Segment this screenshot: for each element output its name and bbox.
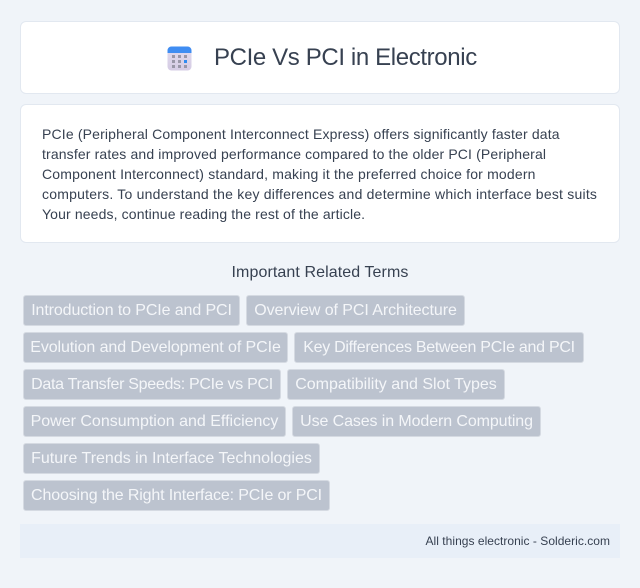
intro text: transfer rates and improved performance compared to the older PCI (Peripheral — [42, 146, 546, 162]
tag: Choosing the Right Interface: PCIe or PCI — [31, 487, 322, 504]
tag — [287, 369, 505, 400]
tag — [246, 295, 465, 326]
title: PCIe Vs PCI in Electronic — [214, 44, 477, 71]
icon: calendar — [168, 46, 192, 70]
intro text: computers. To understand the key differences and determine which interface best suits — [42, 186, 597, 202]
tag — [23, 369, 281, 400]
intro text: Your needs, continue reading the rest of the article. — [42, 206, 365, 222]
tag — [294, 332, 584, 363]
tag — [23, 295, 240, 326]
tag — [23, 332, 288, 363]
tag: Overview of PCI Architecture — [254, 302, 457, 319]
intro text — [42, 126, 597, 222]
footer — [20, 524, 620, 558]
tag: Future Trends in Interface Technologies — [31, 450, 312, 467]
tag list — [23, 295, 584, 511]
tag: Evolution and Development of PCIe — [30, 339, 281, 356]
intro text: Component Interconnect) standard, making it the preferred choice for modern — [42, 166, 536, 182]
tag — [23, 406, 286, 437]
tag: Introduction to PCIe and PCI — [31, 302, 232, 319]
tag: Use Cases in Modern Computing — [300, 413, 533, 430]
tag: Power Consumption and Efficiency — [31, 413, 278, 430]
footer text: All things electronic - Solderic.com — [426, 534, 610, 548]
tag: Data Transfer Speeds: PCIe vs PCI — [31, 376, 273, 393]
panel: introduction — [20, 104, 620, 243]
intro text: PCIe (Peripheral Component Interconnect Express) offers significantly faster data — [42, 126, 560, 142]
tag — [23, 480, 330, 511]
heading: related terms: Important Related Terms — [232, 264, 408, 281]
tag — [23, 443, 320, 474]
header panel — [20, 21, 620, 94]
tag: Key Differences Between PCIe and PCI — [303, 339, 575, 356]
tag: Compatibility and Slot Types — [295, 376, 497, 393]
tag — [292, 406, 541, 437]
